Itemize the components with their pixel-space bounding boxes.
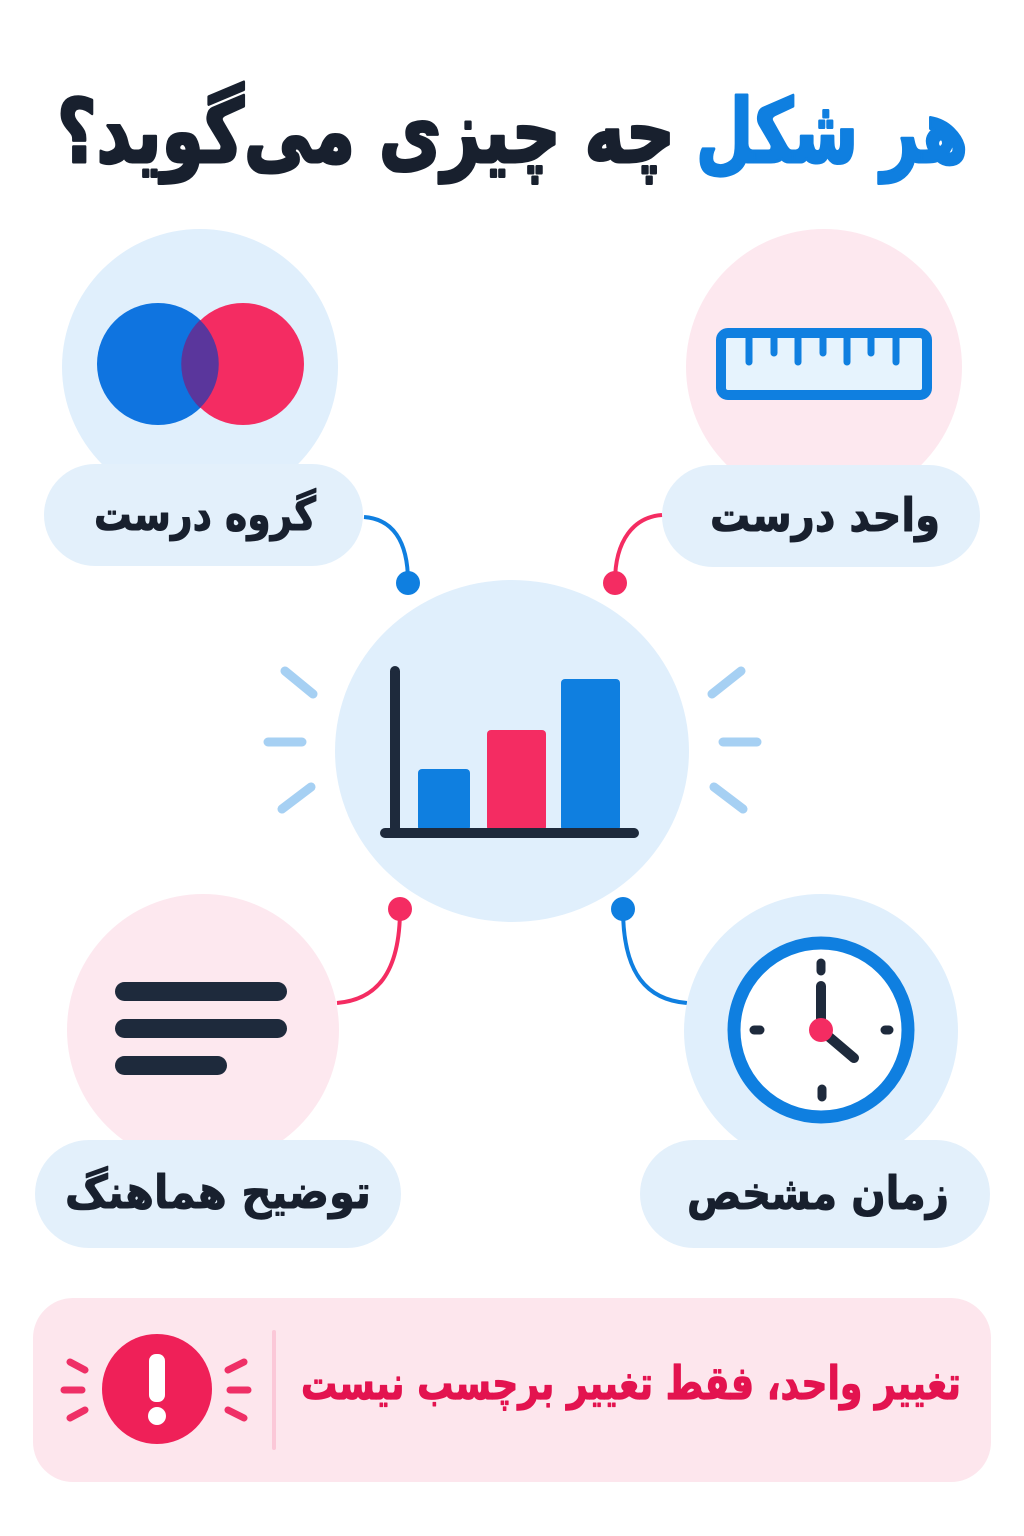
rays: left: [268, 671, 313, 809]
label pill: coherent description: توضیح هماهنگ: [65, 1165, 371, 1219]
label pill: correct unit: [662, 465, 980, 567]
label pill: correct unit: واحد درست: [710, 488, 940, 542]
icon: bar chart: [385, 671, 634, 833]
panel: specific time: [640, 894, 990, 1248]
label pill: specific time: زمان مشخص: [687, 1166, 949, 1220]
rays: right: [712, 671, 757, 809]
icon: overlapping circles: [97, 303, 304, 425]
callout: warning: [33, 1298, 991, 1482]
connector: top right: [603, 515, 662, 595]
panel: center chart: [268, 580, 757, 922]
panel: correct unit: [662, 229, 980, 567]
connector: bottom right: [611, 897, 687, 1003]
label pill: coherent description: [35, 1140, 401, 1248]
panel: coherent description: [35, 894, 401, 1248]
label pill: specific time: [640, 1140, 990, 1248]
icon: ruler: [721, 333, 927, 395]
icon: text lines: [115, 982, 287, 1075]
label pill: correct group: گروه درست: [94, 487, 316, 541]
divider: [272, 1330, 276, 1450]
title: چه چیزی می‌گوید؟: [57, 80, 675, 184]
label pill: correct group: [44, 464, 363, 566]
icon: clock: [734, 943, 908, 1117]
panel: correct group: [44, 229, 363, 566]
connector: top left: [364, 517, 420, 595]
connector: bottom left: [337, 897, 412, 1003]
icon: alert: [64, 1334, 248, 1444]
